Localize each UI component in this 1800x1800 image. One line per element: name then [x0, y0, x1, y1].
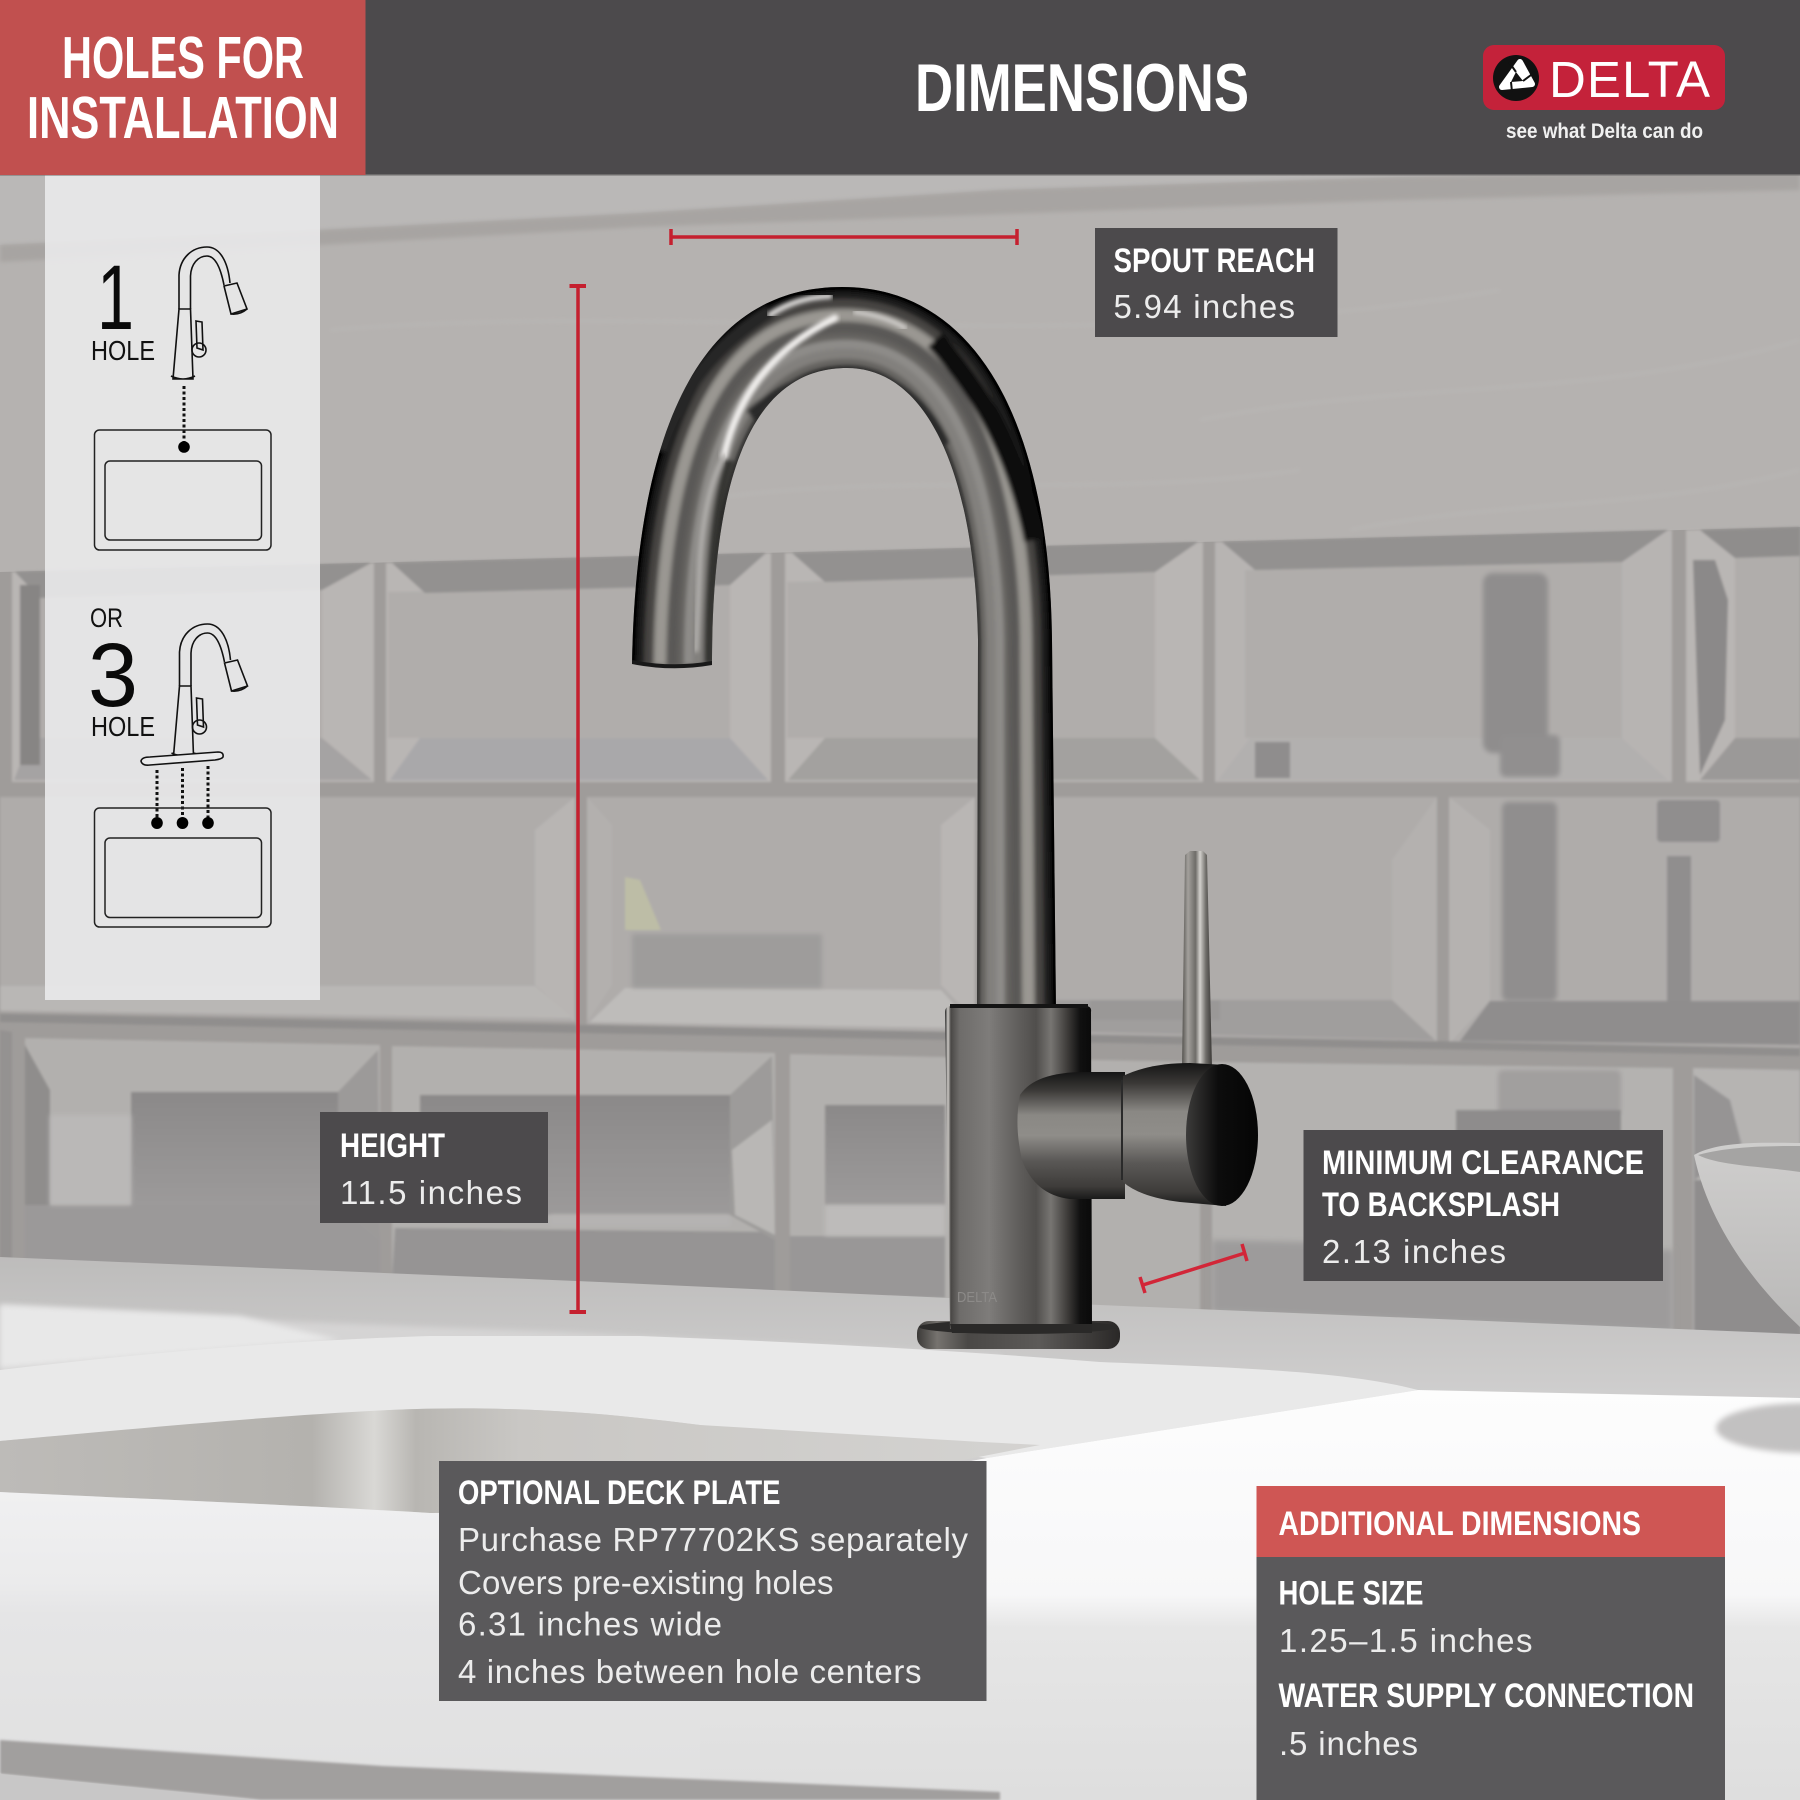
bowl [1694, 1143, 1800, 1327]
counter front [0, 1492, 700, 1800]
panel: additional dimensions: 1.25–1.5 inches [1279, 1622, 1532, 1659]
callout: spout reach [1095, 228, 1338, 337]
spout tube [620, 280, 1070, 1015]
icon: three holes [151, 766, 214, 829]
flange [917, 1321, 1120, 1349]
handle [1017, 1072, 1125, 1199]
panel: additional dimensions [1256, 1486, 1725, 1800]
heading: holes for installation: HOLES FOR [62, 25, 304, 91]
panel: additional dimensions: ADDITIONAL DIMENSIONS [1278, 1505, 1641, 1543]
number 1: 1 [97, 247, 134, 349]
callout: height: 11.5 inches [340, 1174, 522, 1211]
callout: minimum clearance: TO BACKSPLASH [1322, 1186, 1560, 1224]
callout: minimum clearance: MINIMUM CLEARANCE [1322, 1144, 1644, 1182]
icon: deck plate [141, 752, 223, 765]
clearance arrow [1140, 1244, 1247, 1293]
callout: spout reach: 5.94 inches [1114, 288, 1295, 325]
title: DIMENSIONS [915, 50, 1249, 126]
heading: holes for installation [27, 25, 339, 151]
dark centres and reflection [25, 1205, 380, 1278]
panel: holes for installation [45, 175, 320, 1000]
label hole 3: HOLE [91, 711, 155, 742]
callout: minimum clearance [1304, 1130, 1663, 1281]
callout: spout reach: SPOUT REACH [1114, 242, 1315, 280]
panel: additional dimensions: HOLE SIZE [1278, 1574, 1424, 1612]
logo on base: DELTA [957, 1289, 997, 1306]
lever [1182, 851, 1212, 1068]
bottom bevels [14, 738, 372, 780]
callout: optional deck plate: Purchase RP77702KS separately [458, 1521, 968, 1558]
row 3 tiles [0, 1030, 1800, 1340]
callout: height [320, 1112, 548, 1223]
top bevels [15, 563, 371, 598]
panel: additional dimensions: WATER SUPPLY CONNECTION [1278, 1677, 1694, 1715]
callout: optional deck plate: OPTIONAL DECK PLATE [458, 1474, 780, 1512]
label hole: HOLE [91, 335, 155, 366]
tube highlights [724, 318, 835, 456]
panel: additional dimensions: .5 inches [1279, 1725, 1418, 1762]
icon: sink 1 [94, 430, 271, 550]
icon: 1 hole faucet [171, 247, 247, 379]
grout shadow [0, 1014, 1800, 1056]
reflections [632, 934, 822, 988]
logo: delta: DELTA [1549, 51, 1710, 108]
label or: OR [90, 603, 123, 633]
logo: delta [1483, 45, 1725, 143]
heading: holes for installation: INSTALLATION [27, 85, 339, 151]
icon: dotted line to hole [178, 386, 190, 453]
callout: minimum clearance: 2.13 inches [1322, 1233, 1506, 1270]
callout: optional deck plate: 4 inches between hole centers [458, 1653, 922, 1690]
row 1 tiles [12, 527, 1800, 782]
spout reach arrow [671, 229, 1017, 245]
header bar [0, 0, 1800, 176]
body [945, 1006, 1092, 1329]
reflections [20, 585, 40, 765]
icon: sink 3 [94, 808, 271, 927]
logo: delta: see what Delta can do [1506, 120, 1703, 143]
callout: optional deck plate [439, 1461, 986, 1701]
sink basin [0, 1408, 1040, 1513]
bottom ledges [0, 986, 572, 1018]
callout: optional deck plate: 6.31 inches wide [458, 1606, 722, 1642]
spout shading [709, 460, 730, 664]
sink rim [0, 1336, 1418, 1458]
centres [30, 590, 322, 738]
height arrow [570, 286, 586, 1312]
countertop [0, 1257, 1800, 1800]
tile wall grout [0, 527, 1800, 1345]
mouth [632, 660, 712, 668]
callout: optional deck plate: Covers pre-existing holes [458, 1564, 834, 1601]
icon: 3 hole faucet [172, 624, 248, 756]
faucet [620, 280, 1258, 1349]
row 2 tiles [0, 797, 1800, 1056]
callout: height: HEIGHT [340, 1127, 445, 1165]
number 3: 3 [88, 626, 138, 726]
